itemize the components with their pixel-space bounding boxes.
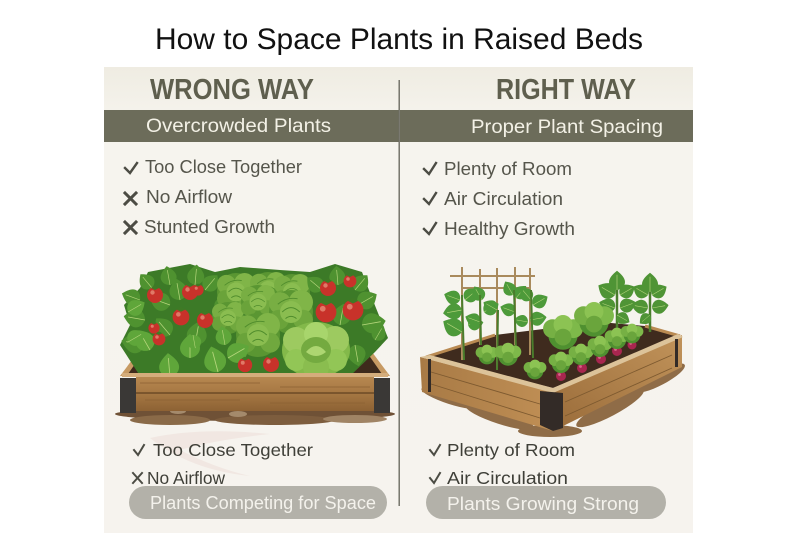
list: wrong way problems: Too Close Together [145,157,302,177]
list: right way benefits [424,159,575,239]
list: wrong way lower notes: Too Close Together [153,440,313,460]
banner: overcrowded plants: Overcrowded Plants [146,116,331,137]
trellis plants [439,278,551,340]
corner brackets [428,339,678,431]
banner: overcrowded plants [104,110,398,142]
list: wrong way problems [125,157,302,237]
list: right way lower notes: Plenty of Room [447,440,575,460]
tomato foliage left [119,264,236,355]
lettuce back row [212,272,313,357]
bed soil [426,322,680,388]
list: right way lower notes: Air Circulation [447,468,568,488]
wooden planks [122,373,388,411]
trellis [450,267,535,370]
pill: plants competing for space [129,486,387,519]
divider [398,80,400,506]
large cabbage [282,322,350,380]
list: right way benefits: Plenty of Room [444,159,572,179]
bed soil and back [120,352,390,376]
pill: plants growing strong [426,486,666,519]
tomatoes [147,274,363,372]
bed walls [420,334,683,431]
trees at back [594,271,670,332]
title: How to Space Plants in Raised Beds [155,23,643,56]
list: wrong way problems: Stunted Growth [144,217,275,237]
soil mound [115,407,395,425]
radish row [549,324,643,381]
list: right way lower notes [430,440,575,488]
illustration: well spaced raised bed [420,267,688,437]
banner: proper plant spacing [400,110,693,142]
pill: plants competing for space: Plants Competing for Space [150,493,376,513]
back rim [426,326,680,357]
pill: plants growing strong: Plants Growing Strong [447,494,639,514]
heading: wrong way: WRONG WAY [150,74,314,106]
banner: proper plant spacing: Proper Plant Spacing [471,117,663,138]
panel: comparison background [104,67,693,533]
list: wrong way problems: No Airflow [146,187,233,207]
list: wrong way lower notes [133,440,313,488]
panel: right way [400,74,693,519]
tomato foliage right [302,265,389,368]
tomato leaves front [124,295,254,378]
smear decoration [150,431,270,476]
list: wrong way lower notes: No Airflow [147,468,225,488]
panel: wrong way [104,74,398,519]
list: right way benefits: Air Circulation [444,189,563,209]
scattered soil [420,359,688,437]
list: right way benefits: Healthy Growth [444,219,575,239]
corner brackets [120,378,390,413]
heading: right way: RIGHT WAY [496,74,636,106]
dense foliage silhouette [120,264,388,376]
lettuce plants [476,302,614,379]
illustration: overcrowded raised bed [115,264,395,425]
